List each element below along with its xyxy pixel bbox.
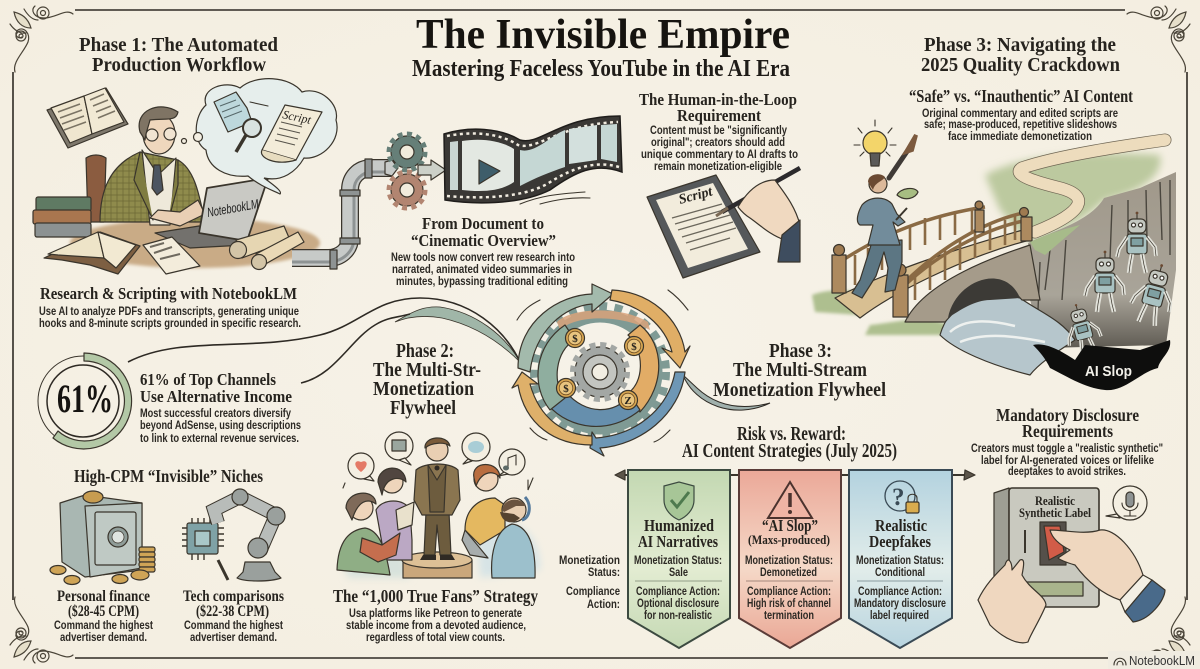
text: safe vs inauthentic xyxy=(909,86,1133,143)
flywheel diagram: $ xyxy=(563,383,569,395)
row labels: Compliance xyxy=(566,584,620,598)
banner: realistic deepfakes: Deepfakes xyxy=(869,532,931,551)
text: from document to cinematic overview: “Cinematic Overview” xyxy=(411,231,556,250)
icon: question mark and lock xyxy=(885,481,919,513)
text: safe vs inauthentic: Original commentary and edited scripts are xyxy=(922,106,1118,120)
text: human in the loop: The Human-in-the-Loop xyxy=(639,90,797,109)
panel: phase 3 quality crackdown xyxy=(812,34,1180,390)
flywheel diagram xyxy=(512,284,690,456)
text: from document to cinematic overview: New tools now convert rew research into xyxy=(391,250,575,264)
banner: AI slop: termination xyxy=(764,608,814,622)
banner: realistic deepfakes: Monetization Status: xyxy=(856,553,944,567)
text: personal finance: Command the highest xyxy=(54,618,153,632)
icon: hands xyxy=(978,530,1165,643)
sub: bearded fan with headphones xyxy=(462,497,535,578)
sub: speech bubbles xyxy=(348,432,525,481)
banner: humanized AI narratives: for non-realistic xyxy=(644,608,712,622)
text: personal finance: advertiser demand. xyxy=(60,630,147,644)
text: safe vs inauthentic: safe; mase-produced, repetitive slideshows xyxy=(924,117,1117,131)
icon: question mark and lock: ? xyxy=(892,484,904,511)
panel: human in the loop xyxy=(639,90,800,278)
banner: realistic deepfakes xyxy=(849,470,952,648)
illustration: bridge over cliff xyxy=(812,120,1180,390)
text: true fans: regardless of total view counts. xyxy=(366,630,505,644)
text: mandatory disclosure: Mandatory Disclosure xyxy=(996,405,1139,425)
banner: AI slop xyxy=(739,470,841,648)
icon: gears xyxy=(389,134,446,208)
text: from document to cinematic overview xyxy=(391,214,575,288)
banner: humanized AI narratives: AI Narratives xyxy=(638,532,718,551)
icon: tablet with script: Script xyxy=(677,184,715,208)
text: human in the loop: unique commentary to AI drafts to xyxy=(641,147,798,161)
chart: 61 percent ring xyxy=(38,353,132,449)
icon: rolled scrolls xyxy=(230,226,304,270)
text: tech comparisons xyxy=(183,588,284,644)
icon: shield check xyxy=(664,482,694,520)
icon: laptop NotebookLM: NotebookLM xyxy=(206,196,260,220)
banner: realistic deepfakes: Mandatory disclosure xyxy=(854,596,946,610)
flywheel diagram: $ xyxy=(572,333,578,345)
callout: thought bubble xyxy=(182,79,337,194)
title: The Invisible Empire xyxy=(416,12,790,58)
illustration: researcher at laptop xyxy=(33,79,337,274)
icon: pipe xyxy=(292,159,398,269)
text: mandatory disclosure xyxy=(971,405,1163,478)
text: alternative income: Most successful creators diversify xyxy=(140,406,291,420)
banner: AI slop: (Maxs-produced) xyxy=(748,532,830,547)
heading: phase 1: Production Workflow xyxy=(92,54,267,76)
icon: robots xyxy=(1059,212,1180,359)
heading: phase 3 flywheel: The Multi-Stream xyxy=(733,359,867,381)
text: tech comparisons: advertiser demand. xyxy=(190,630,277,644)
arrow: green arc xyxy=(518,284,613,372)
text: research and scripting: Use AI to analyze PDFs and transcripts, generating unique xyxy=(39,304,299,318)
icon: tablet with script xyxy=(647,175,760,278)
banner: realistic deepfakes: Compliance Action: xyxy=(858,584,942,598)
arrow: blue arc xyxy=(590,372,685,456)
icon: stacked books xyxy=(33,197,91,237)
heading: phase 2 xyxy=(373,340,481,419)
text: research and scripting xyxy=(39,284,301,330)
arrow: orange arc xyxy=(610,290,690,368)
text: mandatory disclosure: label for AI-generated voices or lifelike xyxy=(981,453,1154,467)
text: alternative income: beyond AdSense, using descriptions xyxy=(140,418,301,432)
panel: phase 1 workflow xyxy=(33,34,337,330)
text: human in the loop xyxy=(639,90,798,173)
icon: switch panel: Realistic xyxy=(1035,493,1075,508)
panel: risk vs reward xyxy=(559,423,975,648)
text: human in the loop: Requirement xyxy=(677,106,761,125)
banner: AI slop: Demonetized xyxy=(760,565,817,579)
text: true fans xyxy=(333,586,538,644)
sub: yellow fan xyxy=(465,464,505,545)
panel: mandatory disclosure xyxy=(971,405,1165,643)
heading: phase 3: Phase 3: Navigating the xyxy=(924,34,1116,56)
callout: AI slop pit xyxy=(1033,340,1170,390)
text: alternative income: 61% of Top Channels xyxy=(140,370,276,389)
banner: humanized AI narratives: Sale xyxy=(669,565,688,579)
icon: open book on desk xyxy=(44,232,140,274)
heading: risk vs reward xyxy=(682,423,897,462)
flywheel diagram: Z xyxy=(624,395,632,407)
text: human in the loop: Content must be "significantly xyxy=(650,123,787,137)
icon: film strip xyxy=(444,116,622,204)
connector curves xyxy=(128,298,770,410)
icon: hand with pen xyxy=(716,168,800,262)
icon: floating open book xyxy=(47,88,128,148)
text: true fans: stable income from a devoted audience, xyxy=(346,618,526,632)
text: from document to cinematic overview: narrated, animated video summaries in xyxy=(392,262,572,276)
banner: humanized AI narratives xyxy=(628,470,730,648)
text: personal finance xyxy=(54,588,153,644)
icon: chip and robot arm xyxy=(182,489,285,581)
text: tech comparisons: Command the highest xyxy=(184,618,283,632)
icon: safe with coins xyxy=(50,491,155,584)
callout: AI slop pit: AI Slop xyxy=(1085,364,1132,380)
text: tech comparisons: Tech comparisons xyxy=(183,588,284,605)
text: mandatory disclosure: Requirements xyxy=(1022,421,1113,441)
text: personal finance: ($28-45 CPM) xyxy=(68,603,139,620)
icon: lightbulb xyxy=(854,120,896,166)
text: research and scripting: Research & Scripting with NotebookLM xyxy=(40,284,297,303)
heading: phase 3 xyxy=(921,34,1120,76)
icon: microphone bubble xyxy=(1106,486,1147,520)
text: human in the loop: original"; creators should add xyxy=(651,135,785,149)
icon: paintbrush xyxy=(889,135,916,178)
panel: 1000 true fans xyxy=(333,432,540,644)
sub: purple fan xyxy=(376,468,414,560)
banner: humanized AI narratives: Humanized xyxy=(644,516,714,535)
banner: AI slop: Compliance Action: xyxy=(747,584,831,598)
text: safe vs inauthentic: face immediate demonetization xyxy=(948,129,1092,143)
text: from document to cinematic overview: From Document to xyxy=(422,214,544,233)
row labels: Monetization xyxy=(559,553,620,567)
heading: phase 2: The Multi-Str- xyxy=(373,359,481,381)
heading: phase 2: Phase 2: xyxy=(396,340,454,362)
banner: AI slop: High risk of channel xyxy=(747,596,831,610)
heading: phase 2: Flywheel xyxy=(390,397,456,419)
sub: podium xyxy=(402,552,472,578)
heading: phase 3 flywheel xyxy=(713,340,886,401)
banner: humanized AI narratives: Monetization Status: xyxy=(634,553,722,567)
heading: niches: High-CPM “Invisible” Niches xyxy=(74,466,263,486)
banner: AI slop: “AI Slop” xyxy=(762,516,818,535)
banner: AI slop: Monetization Status: xyxy=(745,553,833,567)
arrow: yellow arc xyxy=(512,372,592,445)
icon: laptop NotebookLM xyxy=(155,178,268,248)
text: alternative income: to link to external revenue services. xyxy=(140,431,299,445)
panel: 61 percent stat xyxy=(38,353,301,449)
text: personal finance: Personal finance xyxy=(57,588,150,605)
watermark: NotebookLM xyxy=(1108,651,1200,669)
heading: phase 1: Phase 1: The Automated xyxy=(79,34,278,56)
row labels: Action: xyxy=(587,597,620,611)
heading: phase 3 flywheel: Monetization Flywheel xyxy=(713,379,886,401)
text: alternative income: Use Alternative Income xyxy=(140,387,292,406)
row labels: Status: xyxy=(588,565,620,579)
banner: humanized AI narratives: Compliance Action: xyxy=(636,584,720,598)
text: true fans: The “1,000 True Fans” Strategy xyxy=(333,586,538,606)
text: tech comparisons: ($22-38 CPM) xyxy=(196,603,269,620)
icon: warning triangle xyxy=(768,482,812,518)
text: safe vs inauthentic: “Safe” vs. “Inauthentic” AI Content xyxy=(909,86,1133,106)
flywheel diagram: $ xyxy=(631,341,637,353)
text: mandatory disclosure: deeptakes to avoid strikes. xyxy=(1008,464,1126,478)
heading: risk vs reward: AI Content Strategies (July 2025) xyxy=(682,440,897,462)
icon: switch panel: Synthetic Label xyxy=(1019,505,1091,520)
text: research and scripting: hooks and 8-minute scripts grounded in specific research. xyxy=(39,316,301,330)
sub: green fan with book xyxy=(337,493,400,575)
text: from document to cinematic overview: minutes, bypassing traditional editing xyxy=(396,274,568,288)
text: human in the loop: remain monetization-eligible xyxy=(654,159,782,173)
heading: risk vs reward: Risk vs. Reward: xyxy=(737,423,846,445)
heading: phase 2: Monetization xyxy=(373,378,474,400)
panel: document to cinematic overview xyxy=(292,116,622,288)
heading: phase 3: 2025 Quality Crackdown xyxy=(921,54,1120,76)
banner: humanized AI narratives: Optional disclosure xyxy=(637,596,719,610)
banner: realistic deepfakes: Realistic xyxy=(875,516,927,535)
chart: 61 percent ring: 61% xyxy=(57,376,113,421)
callout: thought bubble: Script xyxy=(281,107,313,127)
heading: phase 3 flywheel: Phase 3: xyxy=(769,340,832,362)
banner: realistic deepfakes: label required xyxy=(870,608,929,622)
text: true fans: Usa platforms like Petreon to generate xyxy=(349,606,522,620)
subtitle: Mastering Faceless YouTube in the AI Era xyxy=(412,56,790,82)
icon: switch panel xyxy=(994,488,1099,607)
banner: realistic deepfakes: Conditional xyxy=(875,565,925,579)
text: alternative income xyxy=(140,370,301,445)
illustration: fans around creator xyxy=(337,432,540,578)
row labels xyxy=(559,553,620,611)
panel: high-CPM niches xyxy=(50,466,285,644)
heading: phase 1 xyxy=(79,34,278,76)
